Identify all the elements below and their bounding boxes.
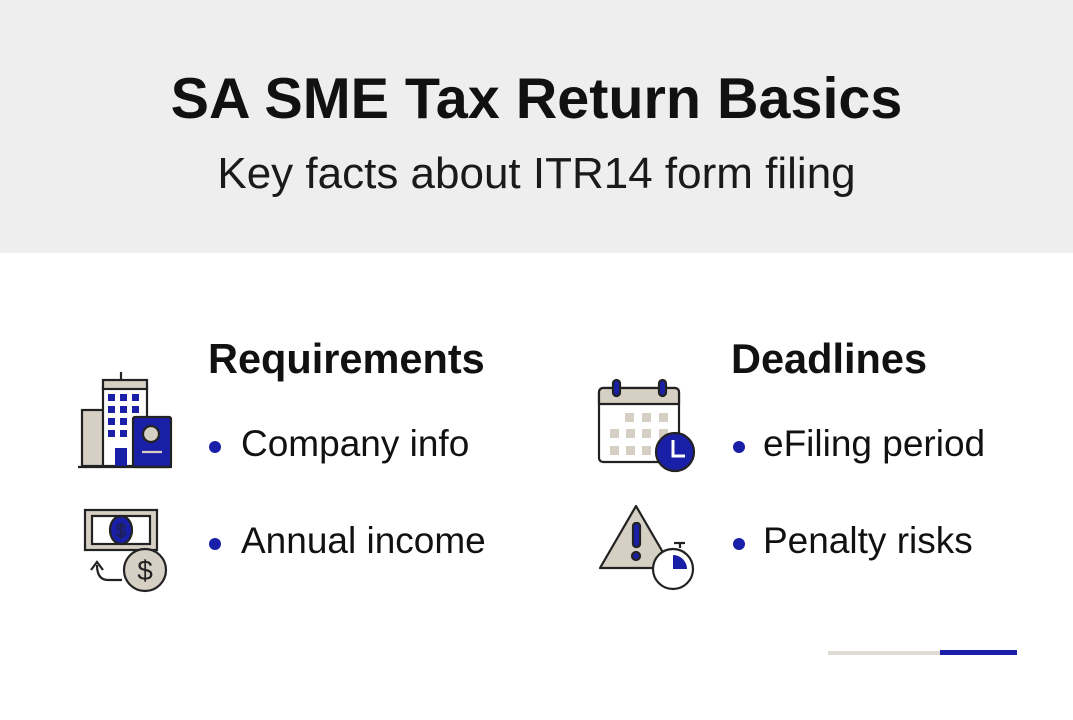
bullet: eFiling period: eFiling period	[763, 423, 985, 464]
heading: Requirements: Requirements	[208, 335, 485, 382]
icon: money: $	[137, 555, 153, 586]
bullet: Annual income: Annual income	[241, 520, 486, 561]
progress bar	[828, 650, 1017, 655]
subtitle: Key facts about ITR14 form filing	[217, 149, 856, 198]
icon: money	[85, 510, 166, 591]
header band	[0, 0, 1073, 253]
icon: building	[78, 372, 172, 467]
heading: Deadlines: Deadlines	[731, 335, 927, 382]
icon: calendar	[599, 380, 694, 471]
bullet: Penalty risks: Penalty risks	[763, 520, 973, 561]
bullet: Company info: Company info	[241, 423, 469, 464]
title: SA SME Tax Return Basics	[171, 67, 902, 131]
icon: money: $	[116, 521, 126, 541]
icon: warning stopwatch	[600, 506, 693, 589]
